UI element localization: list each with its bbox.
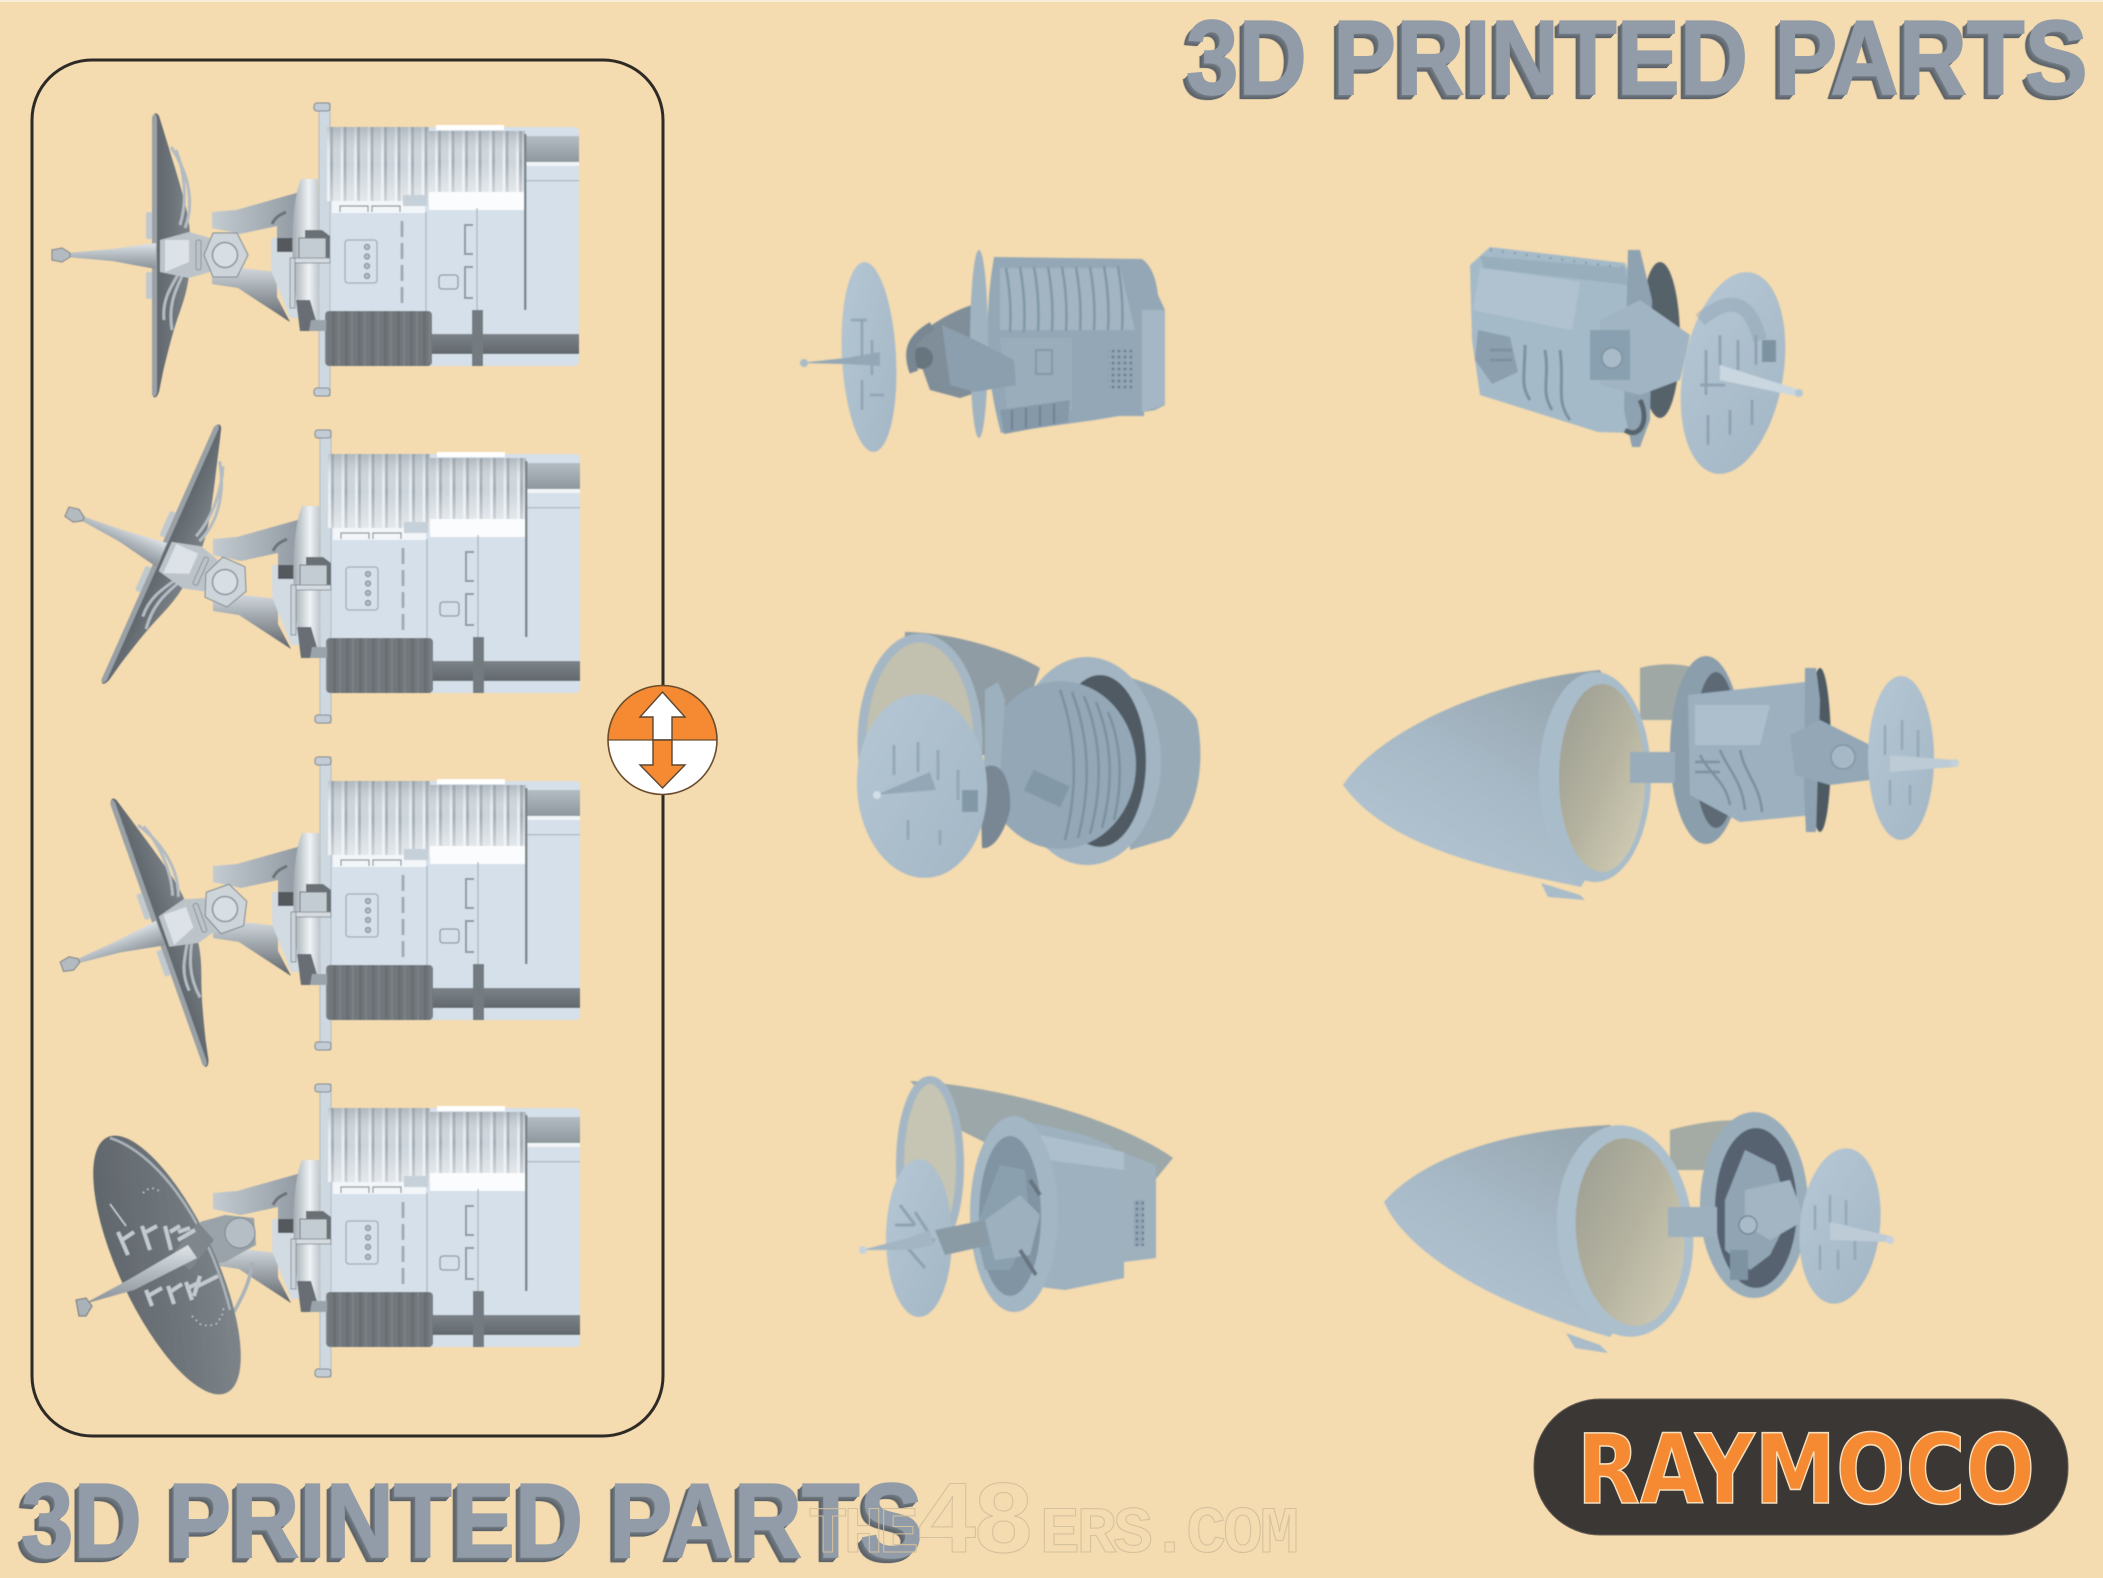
panel: dish angle range — [9, 60, 663, 1436]
photo: open cowl with engine and dish, rear view — [1384, 1112, 1894, 1353]
top highlight edge — [0, 0, 2103, 2]
watermark: THE — [808, 1497, 916, 1572]
title: top right: 3D PRINTED PARTS — [1186, 0, 2088, 117]
photo: open cowl with engine and dish, side view — [1343, 656, 1959, 900]
photo: engine and dish, right rear view — [1470, 247, 1803, 482]
mechanism view: dish centered — [52, 103, 579, 398]
title: bottom left: 3D PRINTED PARTS — [21, 1462, 923, 1578]
icon: double-headed up/down arrow badge — [608, 685, 717, 794]
logo: RAYMOCO badge: RAYMOCO — [1577, 1414, 2035, 1526]
mechanism view: dish tilted down — [15, 757, 580, 1101]
photo: engine and dish, left rear view — [800, 250, 1165, 453]
photo: engine with cowl halves, rear quarter view — [859, 1080, 1173, 1317]
mechanism view: dish tilted up — [9, 382, 580, 723]
mechanism view: dish turned to face — [64, 1084, 580, 1413]
watermark: ERS.COM — [1040, 1497, 1297, 1572]
photo: engine with cowl halves, front-left view — [852, 632, 1200, 881]
